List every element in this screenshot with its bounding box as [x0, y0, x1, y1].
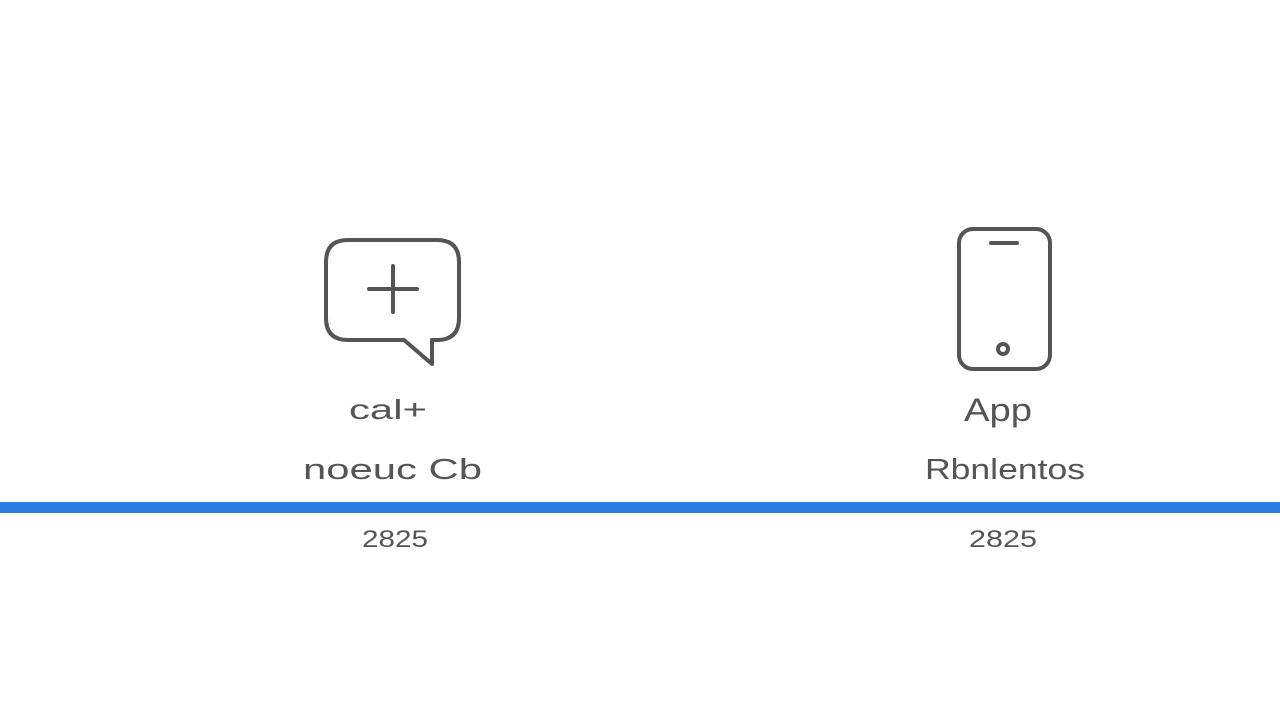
milestone: chat [303, 240, 482, 553]
label: app subtitle: Rbnlentos [925, 454, 1085, 486]
icon: phone [959, 229, 1050, 369]
year: chat: 2825 [362, 526, 428, 553]
icon: chat bubble with plus [326, 240, 459, 364]
label: app title: App [964, 392, 1032, 428]
milestone: app [925, 229, 1085, 553]
year: app: 2825 [969, 526, 1037, 553]
label: chat subtitle: noeuc Cb [303, 454, 482, 486]
timeline line [0, 502, 1280, 513]
label: chat title: cal+ [349, 394, 427, 425]
